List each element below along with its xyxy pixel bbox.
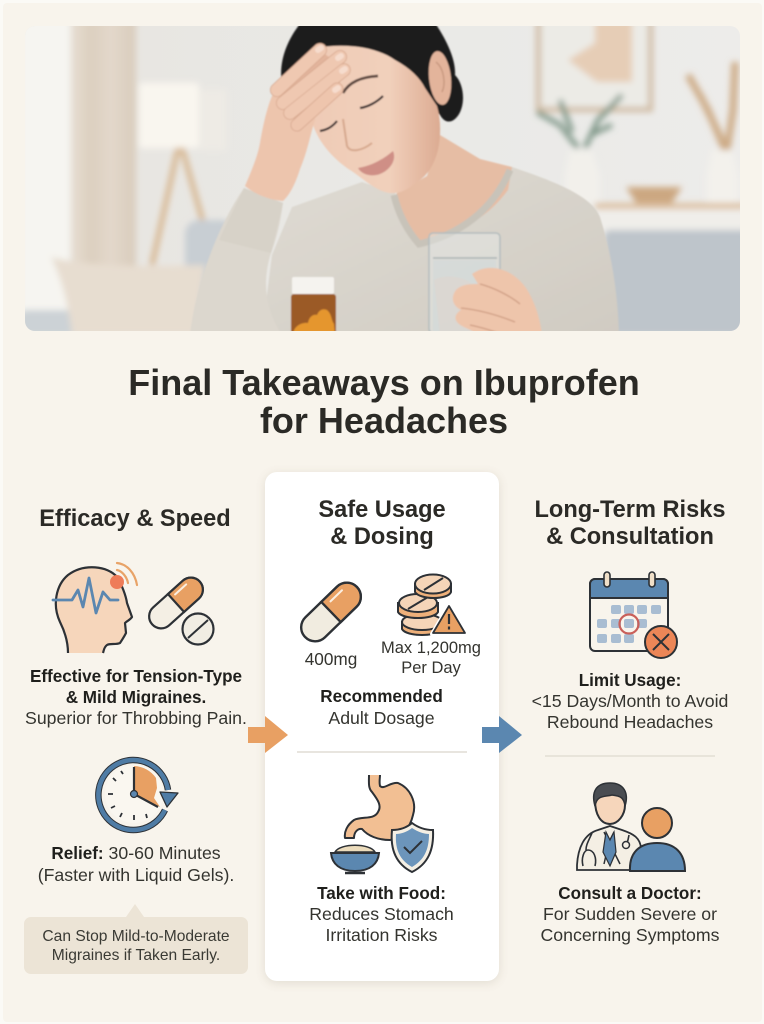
face [313,46,440,193]
arrow: blue [482,716,522,753]
text: consult a doctor: Concerning Symptoms [541,925,719,945]
icon: head with pulse and headache [52,562,138,654]
title [128,362,640,441]
text: take with food: Reduces Stomach [309,904,454,924]
neck [393,135,512,243]
text: relief time: (Faster with Liquid Gels). [38,864,234,884]
text: effective for tension-type: Effective for Tension-Type [30,667,242,686]
panel: efficacy and speed [24,506,248,974]
text: limit usage: <15 Days/Month to Avoid [532,691,728,711]
label: max dose: Max 1,200mg [381,639,481,657]
sleeve [190,188,283,335]
heading: long-term risks: Long-Term Risks [535,497,725,523]
text: limit usage: Rebound Headaches [547,712,713,732]
forearm and palm [244,95,314,202]
photo: woman with headache holding water [25,26,740,331]
ear [426,50,454,106]
divider [545,755,715,756]
background room [20,20,749,335]
torso [262,167,619,335]
heading: safe usage and dosing: Safe Usage [318,497,446,523]
callout: can stop migraines: Can Stop Mild-to-Moderate [42,928,230,945]
hand backing [293,54,328,86]
hair [281,20,463,122]
bottle [292,277,334,294]
icon: clock with return arrow [95,756,179,834]
heading: long-term risks: & Consultation [546,524,714,550]
text: recommended adult dosage [320,687,443,728]
heading: safe usage and dosing [318,497,446,550]
icon: tablets with warning [397,574,466,636]
callout: can stop migraines: Migraines if Taken Early. [52,946,220,964]
text: limit usage [532,671,728,732]
callout: can stop migraines [24,904,248,974]
text: effective for tension-type: & Mild Migraines. [66,688,206,707]
icon: calendar with x [589,571,678,659]
hand behind glass [434,276,480,335]
panel: safe usage and dosing [265,472,499,981]
woman [190,20,619,335]
icon: capsule 400mg [300,582,362,642]
brow, eyes and nose [343,76,378,93]
fingers [277,48,345,125]
text: consult a doctor: For Sudden Severe or [543,904,717,924]
card divider [297,751,467,752]
label: max dose: Per Day [401,658,461,676]
text: consult a doctor: Consult a Doctor: [558,884,702,903]
arrow: orange [248,716,288,753]
text: recommended adult dosage: Recommended [320,687,443,706]
heading: safe usage and dosing: & Dosing [330,524,434,550]
heading: long-term risks [535,497,725,550]
text: recommended adult dosage: Adult Dosage [328,708,435,728]
text: take with food: Irritation Risks [325,925,438,945]
text: effective for tension-type [25,667,247,728]
text: limit usage: Limit Usage: [579,671,681,690]
heading: efficacy and speed: Efficacy & Speed [39,506,231,532]
lips [358,151,394,175]
glass [429,233,500,333]
text: relief time [38,843,234,884]
icon: capsule and tablet [148,576,215,646]
hand fingers [453,268,542,335]
label: 400mg: 400mg [305,649,357,669]
label: max dose [381,639,481,676]
icon: doctor and patient [576,782,686,872]
text: take with food: Take with Food: [317,884,446,903]
text: consult a doctor [541,884,719,945]
text: effective for tension-type: Superior for Throbbing Pain. [25,708,247,728]
title: for Headaches [260,400,508,441]
text: relief time: Relief: 30-60 Minutes [51,843,221,863]
title: Final Takeaways on Ibuprofen [128,362,640,403]
panel: long-term risks and consultation [532,497,728,945]
text: take with food [309,884,454,945]
icon: stomach, food and shield [330,775,434,874]
